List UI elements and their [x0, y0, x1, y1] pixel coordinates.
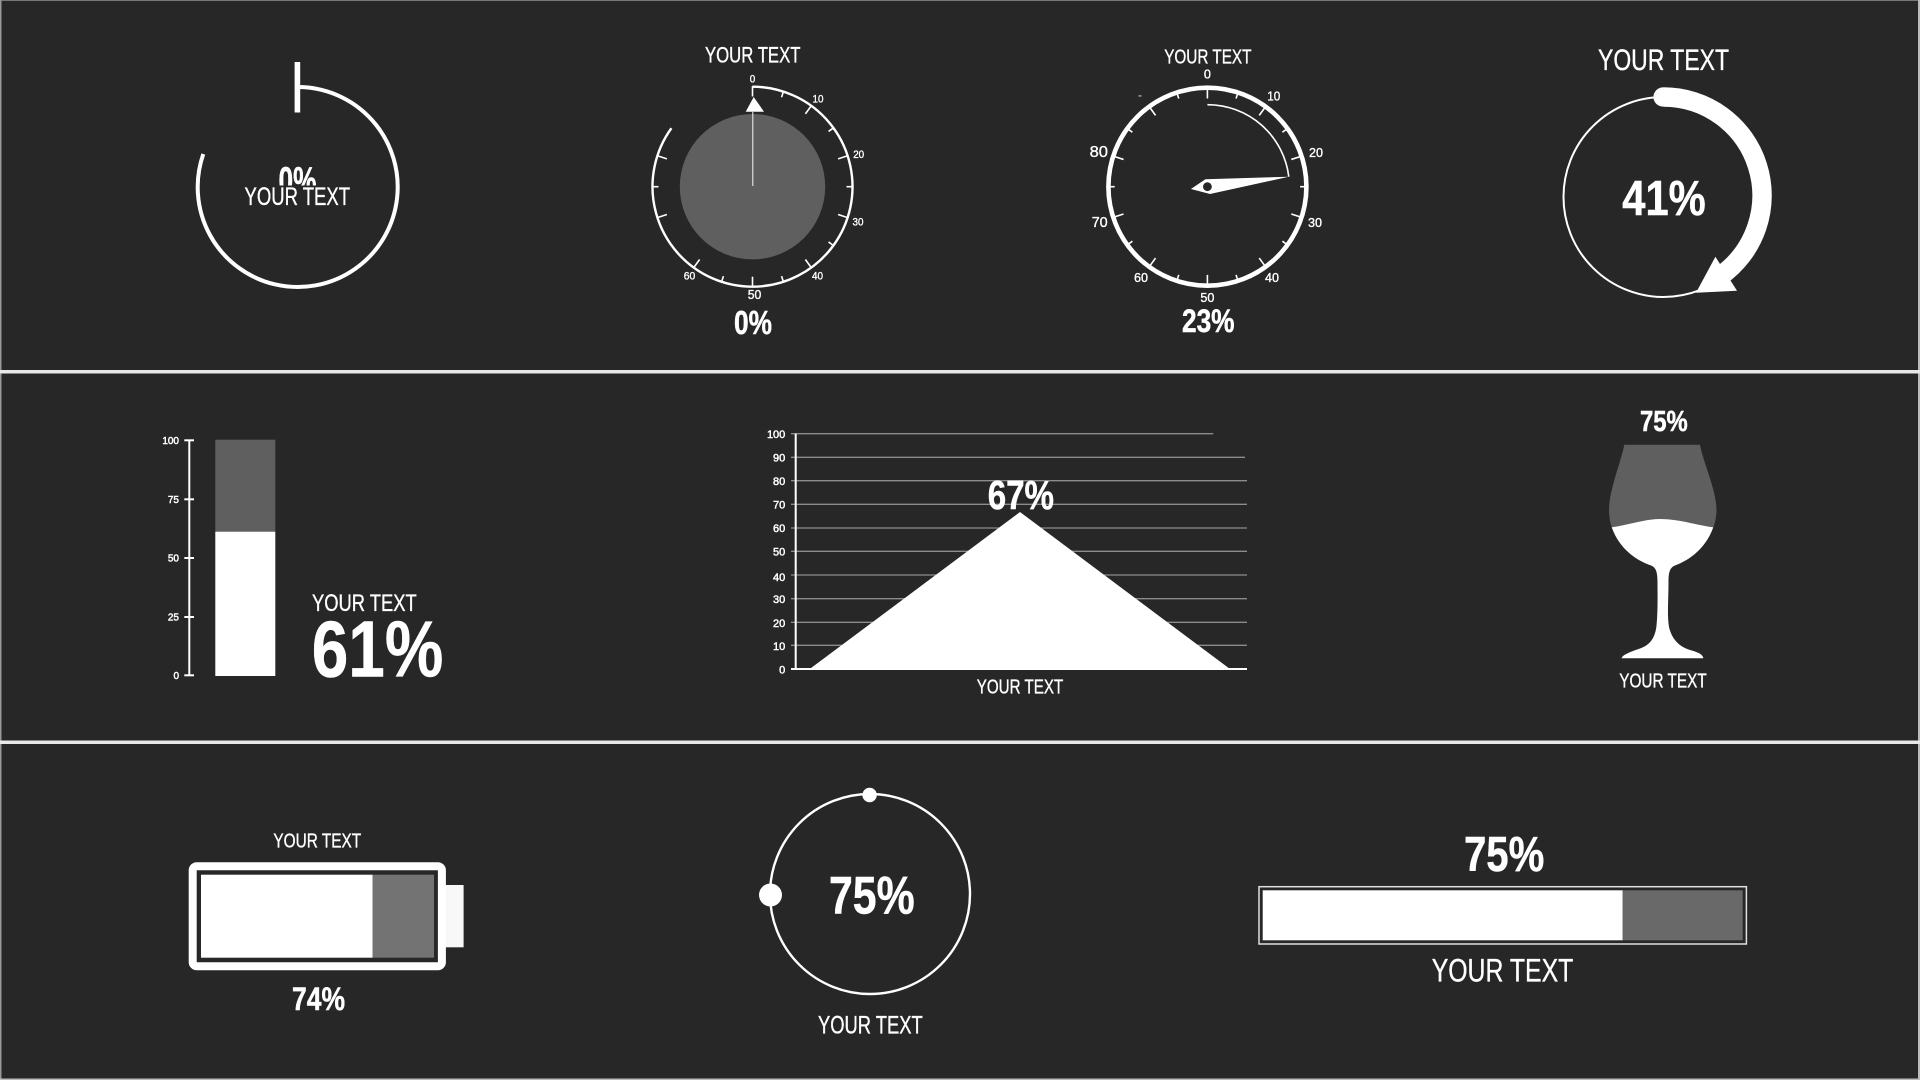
thick progress arc — [1664, 97, 1762, 276]
dial numbers: 70 — [1092, 214, 1108, 231]
axis labels: 70 — [773, 500, 785, 512]
needle hub — [1203, 182, 1212, 191]
gauge: orbit ring 75% — [759, 788, 970, 1039]
dial numbers: 20 — [1309, 145, 1323, 160]
axis labels: 20 — [773, 618, 785, 630]
axis labels: 10 — [773, 641, 785, 653]
panel: middle row of charts — [162, 406, 1716, 698]
start marker — [295, 62, 300, 112]
dial numbers: 30 — [1308, 215, 1322, 230]
axis labels: 30 — [773, 594, 785, 606]
grey disc — [680, 114, 825, 259]
panel: top row of dials — [198, 43, 1764, 341]
label: YOUR TEXT — [1432, 953, 1573, 989]
dial numbers — [1090, 66, 1323, 305]
value: 41% — [1622, 172, 1706, 226]
value: 23% — [1182, 303, 1234, 339]
value: 75% — [1640, 406, 1688, 438]
axis labels: 75 — [168, 495, 179, 506]
progress dot — [759, 884, 782, 906]
glass empty part — [1609, 445, 1716, 527]
needle — [1191, 177, 1289, 194]
needle — [752, 112, 754, 186]
axis labels: 25 — [168, 613, 179, 624]
label: YOUR TEXT — [1598, 44, 1729, 77]
dial ticks — [652, 86, 852, 287]
dial numbers: 10 — [812, 94, 824, 106]
value: 74% — [292, 981, 345, 1017]
battery shell — [193, 866, 442, 966]
axis — [184, 440, 194, 676]
gauge: battery 74% — [193, 830, 464, 1017]
value: 61% — [312, 605, 443, 694]
value: 0% — [734, 304, 772, 341]
axis labels: 90 — [773, 452, 785, 464]
dial numbers: 10 — [1267, 88, 1280, 104]
value clipped: 0% — [278, 160, 316, 203]
ring — [770, 794, 970, 994]
dial numbers: 20 — [853, 149, 864, 161]
bar fill — [1263, 890, 1623, 940]
progress arc — [1207, 105, 1289, 177]
dial ring — [1108, 88, 1306, 286]
arrow head — [1696, 257, 1737, 293]
dial numbers: 0 — [750, 73, 755, 85]
dial numbers: 80 — [1090, 144, 1108, 161]
label: YOUR TEXT — [1164, 46, 1252, 68]
label: YOUR TEXT — [312, 590, 417, 617]
dial numbers — [684, 73, 864, 302]
dial arc — [653, 87, 853, 287]
gauge: speedometer 23% — [1090, 46, 1323, 339]
bar remainder — [1623, 890, 1743, 940]
axis labels: 60 — [773, 523, 785, 535]
battery nub — [445, 885, 464, 947]
ring arc — [198, 87, 398, 287]
dial numbers: 50 — [748, 288, 761, 302]
pointer triangle — [746, 97, 764, 112]
thin ring — [1564, 97, 1764, 297]
panel: bottom row — [193, 788, 1746, 1039]
dial numbers: 40 — [1265, 270, 1279, 285]
chart: vertical bar 61% — [162, 436, 443, 694]
axis labels: 0 — [779, 664, 785, 676]
label: YOUR TEXT — [244, 183, 350, 211]
gauge: arrow ring 41% — [1564, 44, 1764, 297]
dial numbers: 50 — [1200, 290, 1214, 305]
value: 75% — [829, 866, 915, 925]
dial numbers: 30 — [852, 217, 864, 229]
axis labels: 40 — [773, 572, 785, 584]
speck — [1138, 95, 1142, 97]
label: YOUR TEXT — [977, 676, 1063, 698]
axis labels: 100 — [767, 429, 785, 441]
value: 75% — [1464, 828, 1544, 882]
dial numbers: 40 — [812, 270, 823, 282]
label: YOUR TEXT — [273, 830, 361, 852]
bar track — [215, 440, 275, 532]
top dot — [862, 788, 877, 802]
glass liquid and stem — [1612, 519, 1713, 658]
label: YOUR TEXT — [705, 43, 800, 68]
triangle — [811, 512, 1229, 668]
dial numbers: 0 — [1204, 66, 1211, 82]
value: 67% — [988, 472, 1054, 518]
axis labels — [162, 436, 179, 682]
x axis — [791, 668, 1247, 670]
axis labels: 100 — [162, 436, 179, 447]
bar frame — [1259, 887, 1746, 944]
chart: triangle area 67% — [767, 429, 1247, 698]
dial ticks — [1109, 88, 1306, 285]
gauge: open ring 0% — [198, 62, 398, 287]
axis labels: 80 — [773, 476, 785, 488]
battery remainder — [372, 875, 434, 958]
dial numbers: 60 — [1134, 270, 1148, 285]
arc round start — [1653, 87, 1673, 107]
label: YOUR TEXT — [818, 1011, 923, 1039]
axis labels: 50 — [773, 546, 785, 558]
axis labels: 50 — [168, 554, 179, 565]
label: YOUR TEXT — [1619, 671, 1707, 693]
bar fill — [215, 532, 275, 676]
chart: wine glass 75% — [1609, 406, 1716, 693]
gauge: horizontal bar 75% — [1259, 828, 1746, 989]
grid lines — [791, 434, 1247, 645]
y axis — [795, 434, 797, 670]
axis labels: 0 — [173, 671, 179, 682]
dial numbers: 60 — [684, 270, 695, 282]
gauge: thin dial with disc 0% — [652, 43, 864, 341]
axis labels — [767, 429, 785, 676]
battery fill — [201, 875, 372, 958]
